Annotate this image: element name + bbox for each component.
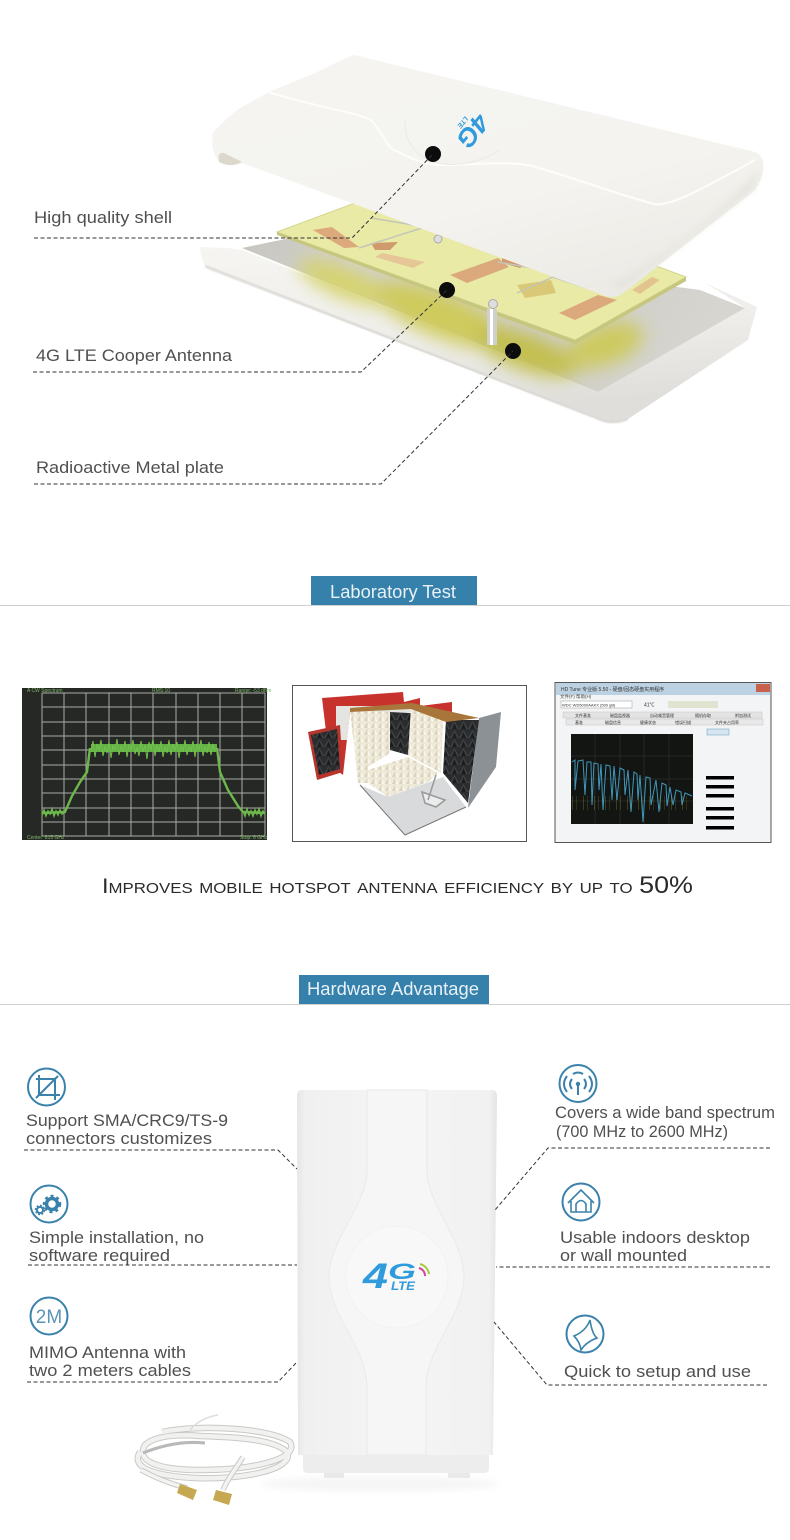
feature: quick setup: Quick to setup and use bbox=[564, 1362, 751, 1381]
callout: copper antenna bbox=[33, 282, 455, 372]
section header: laboratory test bbox=[0, 576, 790, 606]
screenshot: HD Tune benchmark: 附加测试 bbox=[735, 712, 751, 718]
gold connectors bbox=[177, 1484, 232, 1505]
4G LTE logo: LTE bbox=[391, 1279, 416, 1293]
section header: hardware advantage bbox=[0, 975, 790, 1005]
antenna product bbox=[138, 1090, 500, 1505]
screenshot: HD Tune benchmark: 文件夹占用率 bbox=[715, 719, 739, 725]
feature: simple installation bbox=[28, 1186, 297, 1265]
chart: spectrum analyser: A CW Spectrum bbox=[27, 688, 63, 694]
icon: house bbox=[562, 1184, 600, 1220]
yellow oxidised patches bbox=[293, 250, 649, 388]
feature: indoor use: Usable indoors desktop bbox=[560, 1228, 750, 1247]
antenna shadow bbox=[260, 1477, 500, 1491]
icon: gears bbox=[30, 1186, 68, 1222]
screenshot: HD Tune benchmark: 文件基准 bbox=[575, 712, 591, 718]
antenna base bbox=[303, 1455, 489, 1473]
callout: high quality shell: High quality shell bbox=[34, 208, 172, 227]
screenshot: HD Tune benchmark: 41℃ bbox=[644, 702, 655, 708]
top shell bbox=[212, 55, 763, 297]
feature: indoor use bbox=[496, 1184, 770, 1267]
screenshot: HD Tune benchmark: HD Tune 专业版 5.50 - 硬盘/固态硬盘实用程序 bbox=[561, 686, 664, 693]
screenshot: HD Tune benchmark bbox=[555, 682, 771, 842]
chart: spectrum analyser: RMS:10 bbox=[152, 688, 170, 694]
feature: connectors: connectors customizes bbox=[26, 1129, 212, 1148]
chart: spectrum analyser: Stop: 8 GHz bbox=[240, 835, 268, 841]
pcb board bbox=[277, 203, 686, 340]
screenshot: HD Tune benchmark: 随机存取 bbox=[695, 712, 711, 718]
screenshot: HD Tune benchmark: 磁盘信息 bbox=[605, 719, 621, 725]
feature: simple installation: Simple installation, no bbox=[29, 1228, 204, 1247]
antenna centre panel bbox=[329, 1090, 464, 1455]
section header: hardware advantage: Hardware Advantage bbox=[307, 979, 479, 999]
feature: simple installation: software required bbox=[29, 1246, 170, 1265]
callout: metal plate: Radioactive Metal plate bbox=[36, 458, 224, 477]
logo on shell: 4G bbox=[451, 107, 496, 154]
screenshot: HD Tune benchmark: 文件(F) 帮助(H) bbox=[560, 693, 592, 700]
feature: MIMO cables bbox=[27, 1298, 297, 1382]
screenshot: HD Tune benchmark: 基准 bbox=[575, 719, 583, 725]
coiled cables bbox=[138, 1415, 291, 1490]
feature: connectors: Support SMA/CRC9/TS-9 bbox=[26, 1111, 228, 1130]
callout: high quality shell bbox=[34, 146, 441, 238]
chart: spectrum analyser bbox=[22, 688, 271, 841]
screenshot: HD Tune benchmark: 自动噪音管理 bbox=[650, 712, 674, 718]
screws and standoff bbox=[434, 235, 498, 345]
feature: connectors bbox=[24, 1068, 297, 1169]
lower tray bbox=[200, 247, 757, 422]
silver feed wires bbox=[359, 218, 598, 293]
antenna body bbox=[297, 1090, 497, 1455]
feature: wide band spectrum bbox=[495, 1065, 775, 1210]
headline: efficiency claim: Improves mobile hotspot antenna efficiency by up to 50% bbox=[102, 872, 693, 899]
icon: diamond ribbon bbox=[566, 1316, 604, 1352]
feature: quick setup bbox=[494, 1316, 767, 1385]
screenshot: HD Tune benchmark: WDC WD5000AAKX (500 gB) bbox=[562, 702, 616, 708]
section header: laboratory test: Laboratory Test bbox=[330, 582, 456, 602]
4G LTE logo: 4 bbox=[362, 1257, 388, 1296]
illustration: anechoic chamber bbox=[292, 686, 526, 842]
logo on shell: LTE bbox=[455, 115, 469, 129]
feature: MIMO cables: two 2 meters cables bbox=[29, 1361, 191, 1380]
feature: wide band spectrum: Covers a wide band spectrum bbox=[555, 1103, 775, 1122]
icon: crop bbox=[28, 1068, 65, 1106]
4G LTE logo: G bbox=[388, 1259, 416, 1284]
callout: copper antenna: 4G LTE Cooper Antenna bbox=[36, 346, 233, 365]
chart: spectrum analyser: Center: 815 GHz bbox=[27, 835, 65, 841]
callout: metal plate bbox=[34, 343, 521, 484]
copper strips bbox=[313, 227, 660, 320]
metal plate bbox=[242, 236, 745, 392]
icon: signal tower bbox=[560, 1065, 596, 1102]
icon: 2M bbox=[30, 1298, 68, 1334]
product image: exploded antenna bbox=[200, 55, 763, 422]
feature: indoor use: or wall mounted bbox=[560, 1246, 687, 1265]
feature: wide band spectrum: (700 MHz to 2600 MHz) bbox=[556, 1122, 728, 1141]
feature: MIMO cables: MIMO Antenna with bbox=[29, 1343, 186, 1362]
icon: 2M: 2M bbox=[36, 1307, 62, 1328]
screenshot: HD Tune benchmark: 磁盘监视器 bbox=[610, 712, 630, 718]
screenshot: HD Tune benchmark: 错误扫描 bbox=[675, 719, 691, 725]
4G LTE logo bbox=[362, 1257, 429, 1296]
chart: spectrum analyser: Range: -53 dBm bbox=[235, 688, 271, 694]
screenshot: HD Tune benchmark: 健康状态 bbox=[640, 719, 656, 725]
